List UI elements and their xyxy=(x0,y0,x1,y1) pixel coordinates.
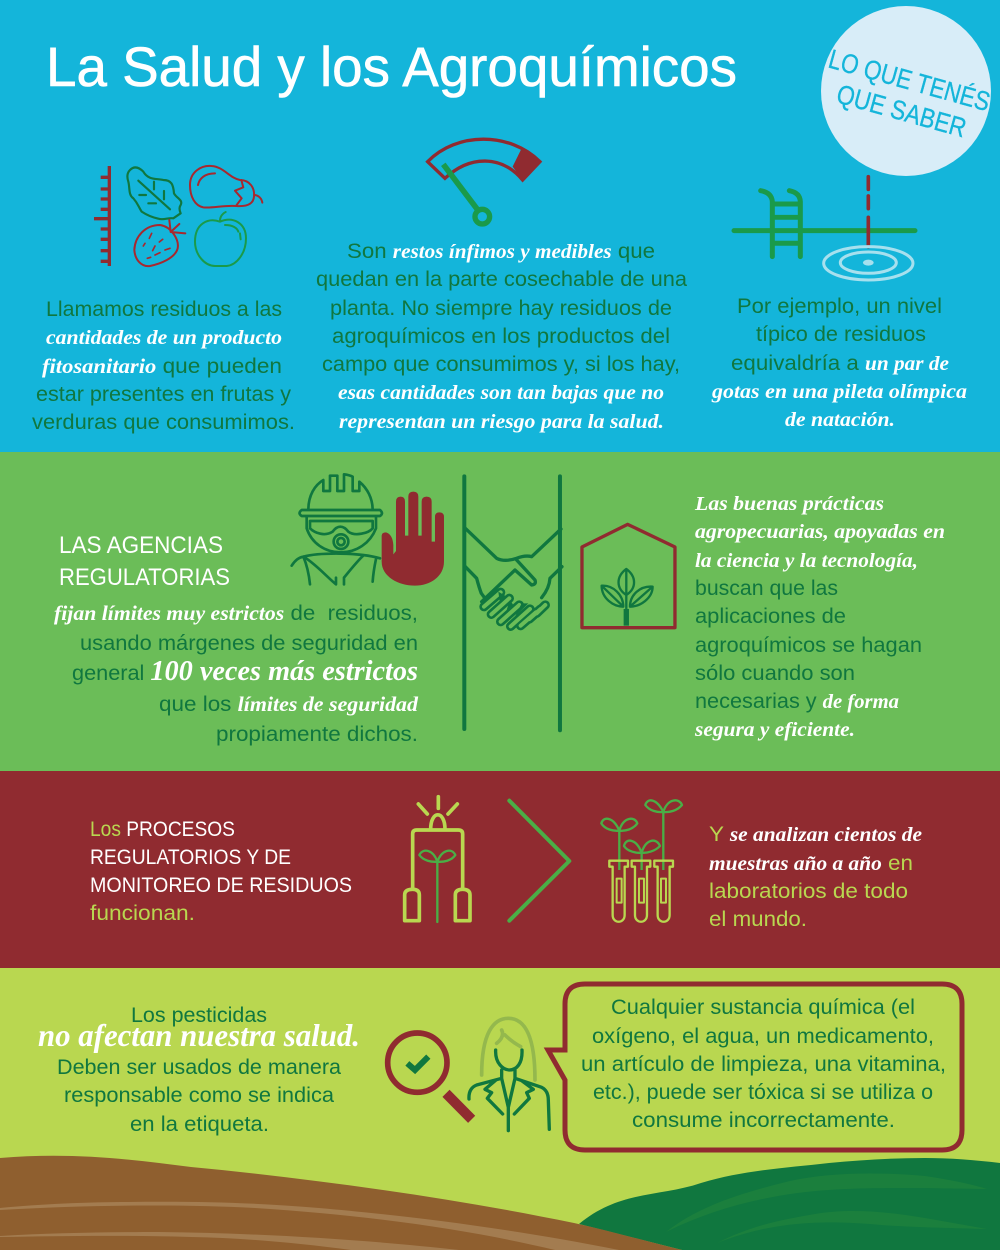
text: restos ínfimos: Son restos ínfimos y medibles que xyxy=(347,239,655,263)
text: los pesticidas: en la etiqueta. xyxy=(130,1112,269,1136)
icon: woman in suit xyxy=(469,1018,549,1131)
text: muestras en laboratorios: laboratorios de todo xyxy=(709,879,908,903)
text: ejemplo pileta: típico de residuos xyxy=(756,322,926,346)
callout: speech bubble: consume incorrectamente. xyxy=(632,1108,895,1132)
text: muestras en laboratorios: el mundo. xyxy=(709,907,807,931)
icon: magnifying glass with check xyxy=(388,1033,472,1119)
text: restos ínfimos: representan un riesgo para la salud. xyxy=(339,411,664,433)
text: ejemplo pileta: equivaldría a un par de xyxy=(731,351,949,375)
text: buenas prácticas: sólo cuando son xyxy=(695,661,855,685)
icon: handshake between lines xyxy=(464,476,562,730)
text: los pesticidas: responsable como se indica xyxy=(64,1083,334,1107)
callout: speech bubble xyxy=(548,984,962,1150)
badge: lo que tenés que saber: QUE SABER xyxy=(833,79,970,143)
callout: speech bubble: Cualquier sustancia química (el xyxy=(611,995,915,1019)
text: definición de residuos: fitosanitario que pueden xyxy=(42,354,282,378)
text: buenas prácticas: agroquímicos se hagan xyxy=(695,633,922,657)
text: muestras en laboratorios: Y se analizan cientos de xyxy=(709,822,922,846)
text: buenas prácticas: la ciencia y la tecnología, xyxy=(695,550,918,572)
text: restos ínfimos: planta. No siempre hay residuos de xyxy=(330,296,672,320)
text: definición de residuos: estar presentes en frutas y xyxy=(36,382,291,406)
text: definición de residuos: Llamamos residuos a las xyxy=(46,297,282,321)
text: buenas prácticas: Las buenas prácticas xyxy=(694,493,884,515)
text: restos ínfimos: campo que consumimos y, si los hay, xyxy=(322,352,680,376)
icon: plant in greenhouse xyxy=(582,524,675,628)
panel: procesos regulatorios xyxy=(0,771,1000,968)
text: restos ínfimos: agroquímicos en los productos del xyxy=(332,324,670,348)
text: restos ínfimos: quedan en la parte cosechable de una xyxy=(316,267,687,291)
text: ejemplo pileta: Por ejemplo, un nivel xyxy=(737,294,942,318)
text: las agencias regulatorias: usando márgenes de seguridad en xyxy=(80,631,418,655)
text: buenas prácticas: buscan que las xyxy=(695,576,838,600)
text: las agencias regulatorias: que los límites de seguridad xyxy=(159,692,419,716)
text: los procesos funcionan: REGULATORIOS Y DE xyxy=(90,845,291,869)
arrow: chevron xyxy=(509,801,569,921)
text: los pesticidas: Deben ser usados de manera xyxy=(57,1055,341,1079)
text: los procesos funcionan xyxy=(90,817,352,925)
panel: residuos xyxy=(0,0,1000,452)
icon: seedlings in test tubes xyxy=(601,800,682,922)
illustration: green hill xyxy=(579,1158,1000,1250)
text: definición de residuos xyxy=(32,297,295,434)
text: los pesticidas xyxy=(38,1003,360,1136)
text: las agencias regulatorias: LAS AGENCIAS xyxy=(59,532,223,559)
text: los pesticidas: Los pesticidas xyxy=(131,1003,267,1027)
callout: speech bubble: un artículo de limpieza, una vitamina, xyxy=(581,1052,946,1076)
icon: pool with drops xyxy=(734,177,915,280)
text: ejemplo pileta xyxy=(711,294,967,431)
text: los pesticidas: no afectan nuestra salud. xyxy=(38,1017,360,1053)
text: muestras en laboratorios: muestras año a año en xyxy=(709,851,913,875)
text: las agencias regulatorias: fijan límites muy estrictos de residuos, xyxy=(54,601,418,625)
illustration: brown field xyxy=(0,1156,682,1250)
text: las agencias regulatorias: REGULATORIAS xyxy=(59,564,230,591)
icon: produce with ruler xyxy=(94,166,262,266)
text: buenas prácticas: aplicaciones de xyxy=(695,604,846,628)
icon: gauge xyxy=(428,139,540,224)
panel: agencias regulatorias xyxy=(0,452,1000,771)
badge: lo que tenés que saber xyxy=(821,6,993,176)
icon: stop hand xyxy=(382,492,444,586)
text: buenas prácticas: segura y eficiente. xyxy=(694,719,855,741)
icon: plant under lamp xyxy=(405,797,470,922)
callout: speech bubble: etc.), puede ser tóxica si se utiliza o xyxy=(593,1080,933,1104)
icon: worker with safety gear xyxy=(292,474,382,584)
text: definición de residuos: cantidades de un producto xyxy=(46,327,282,349)
text: buenas prácticas: agropecuarias, apoyadas en xyxy=(695,521,945,543)
title: La Salud y los Agroquímicos xyxy=(46,35,737,98)
text: ejemplo pileta: gotas en una pileta olímpica xyxy=(711,381,967,403)
text: las agencias regulatorias: propiamente dichos. xyxy=(216,722,418,746)
text: buenas prácticas: necesarias y de forma xyxy=(695,689,899,713)
panel: pesticidas xyxy=(0,968,1000,1250)
text: definición de residuos: verduras que consumimos. xyxy=(32,410,295,434)
text: restos ínfimos: esas cantidades son tan bajas que no xyxy=(338,382,664,404)
text: las agencias regulatorias: general 100 veces más estrictos xyxy=(72,656,418,687)
text: restos ínfimos xyxy=(316,239,687,433)
text: muestras en laboratorios xyxy=(709,822,922,931)
text: los procesos funcionan: MONITOREO DE RESIDUOS xyxy=(90,873,352,897)
text: los procesos funcionan: Los PROCESOS xyxy=(90,817,235,841)
text: buenas prácticas xyxy=(694,493,945,741)
text: ejemplo pileta: de natación. xyxy=(785,409,895,431)
text: los procesos funcionan: funcionan. xyxy=(90,901,195,925)
callout: speech bubble: oxígeno, el agua, un medicamento, xyxy=(592,1024,934,1048)
text: las agencias regulatorias xyxy=(54,532,419,746)
